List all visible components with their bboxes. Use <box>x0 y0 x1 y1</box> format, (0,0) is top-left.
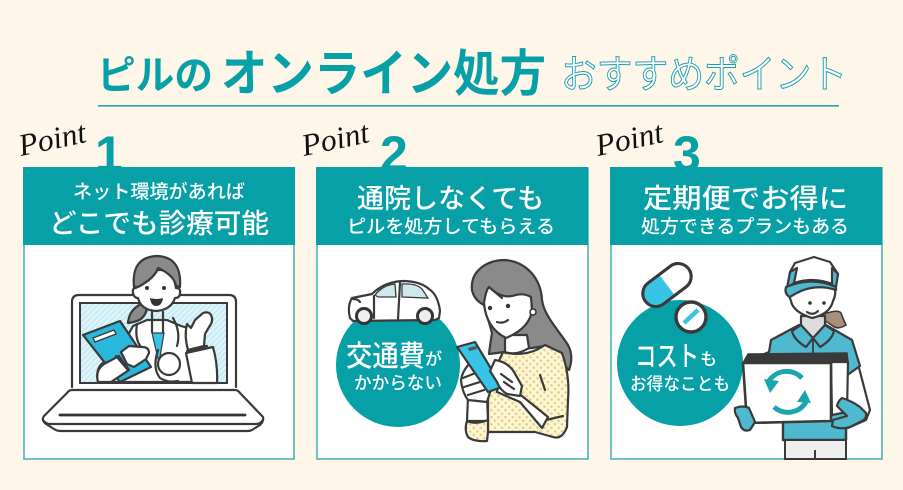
point 1 label <box>14 114 123 182</box>
callout: cost savings: お得なことも <box>630 374 730 394</box>
point 1 header <box>23 167 295 245</box>
point 3 header: 処方できるプランもある <box>641 216 849 237</box>
callout: transport costs: 交通費 <box>346 340 425 373</box>
callout: transport costs <box>336 303 460 427</box>
point 2 label: Point <box>297 114 373 163</box>
point 1 label: 1 <box>95 126 123 182</box>
icon: capsule and tablet <box>638 258 706 332</box>
panel: point 3 <box>591 114 882 459</box>
point 2 label <box>297 114 408 182</box>
callout: transport costs: が <box>425 349 442 369</box>
panel: point 1 <box>14 114 295 459</box>
panel: point 2 <box>297 114 588 459</box>
illustration: car <box>349 281 440 324</box>
illustration: doctor on laptop <box>43 256 263 431</box>
title: ピルの <box>97 54 213 98</box>
point 3 header: 定期便でお得に <box>643 184 848 214</box>
point 1 header: ネット環境があれば <box>73 181 245 203</box>
point 2 header: 通院しなくても <box>357 184 544 214</box>
point 1 label: Point <box>14 114 90 163</box>
callout: transport costs: かからない <box>354 373 442 393</box>
point 2 label: 2 <box>380 126 408 182</box>
point 1 header: どこでも診療可能 <box>49 209 269 239</box>
point 2 header <box>316 167 588 245</box>
title <box>97 46 847 102</box>
callout: cost savings: コスト <box>635 341 699 372</box>
point 3 header <box>610 167 882 245</box>
point 3 label <box>591 114 701 182</box>
point 2 header: ピルを処方してもらえる <box>347 216 555 237</box>
point 3 label: 3 <box>673 126 701 182</box>
title: オンライン処方 <box>221 46 546 102</box>
callout: cost savings <box>617 300 743 426</box>
point 3 label: Point <box>591 114 667 163</box>
title: おすすめポイント <box>561 54 847 97</box>
callout: cost savings: も <box>700 350 717 369</box>
illustration: woman with smartphone <box>457 260 571 441</box>
illustration: delivery person with box <box>735 257 870 459</box>
